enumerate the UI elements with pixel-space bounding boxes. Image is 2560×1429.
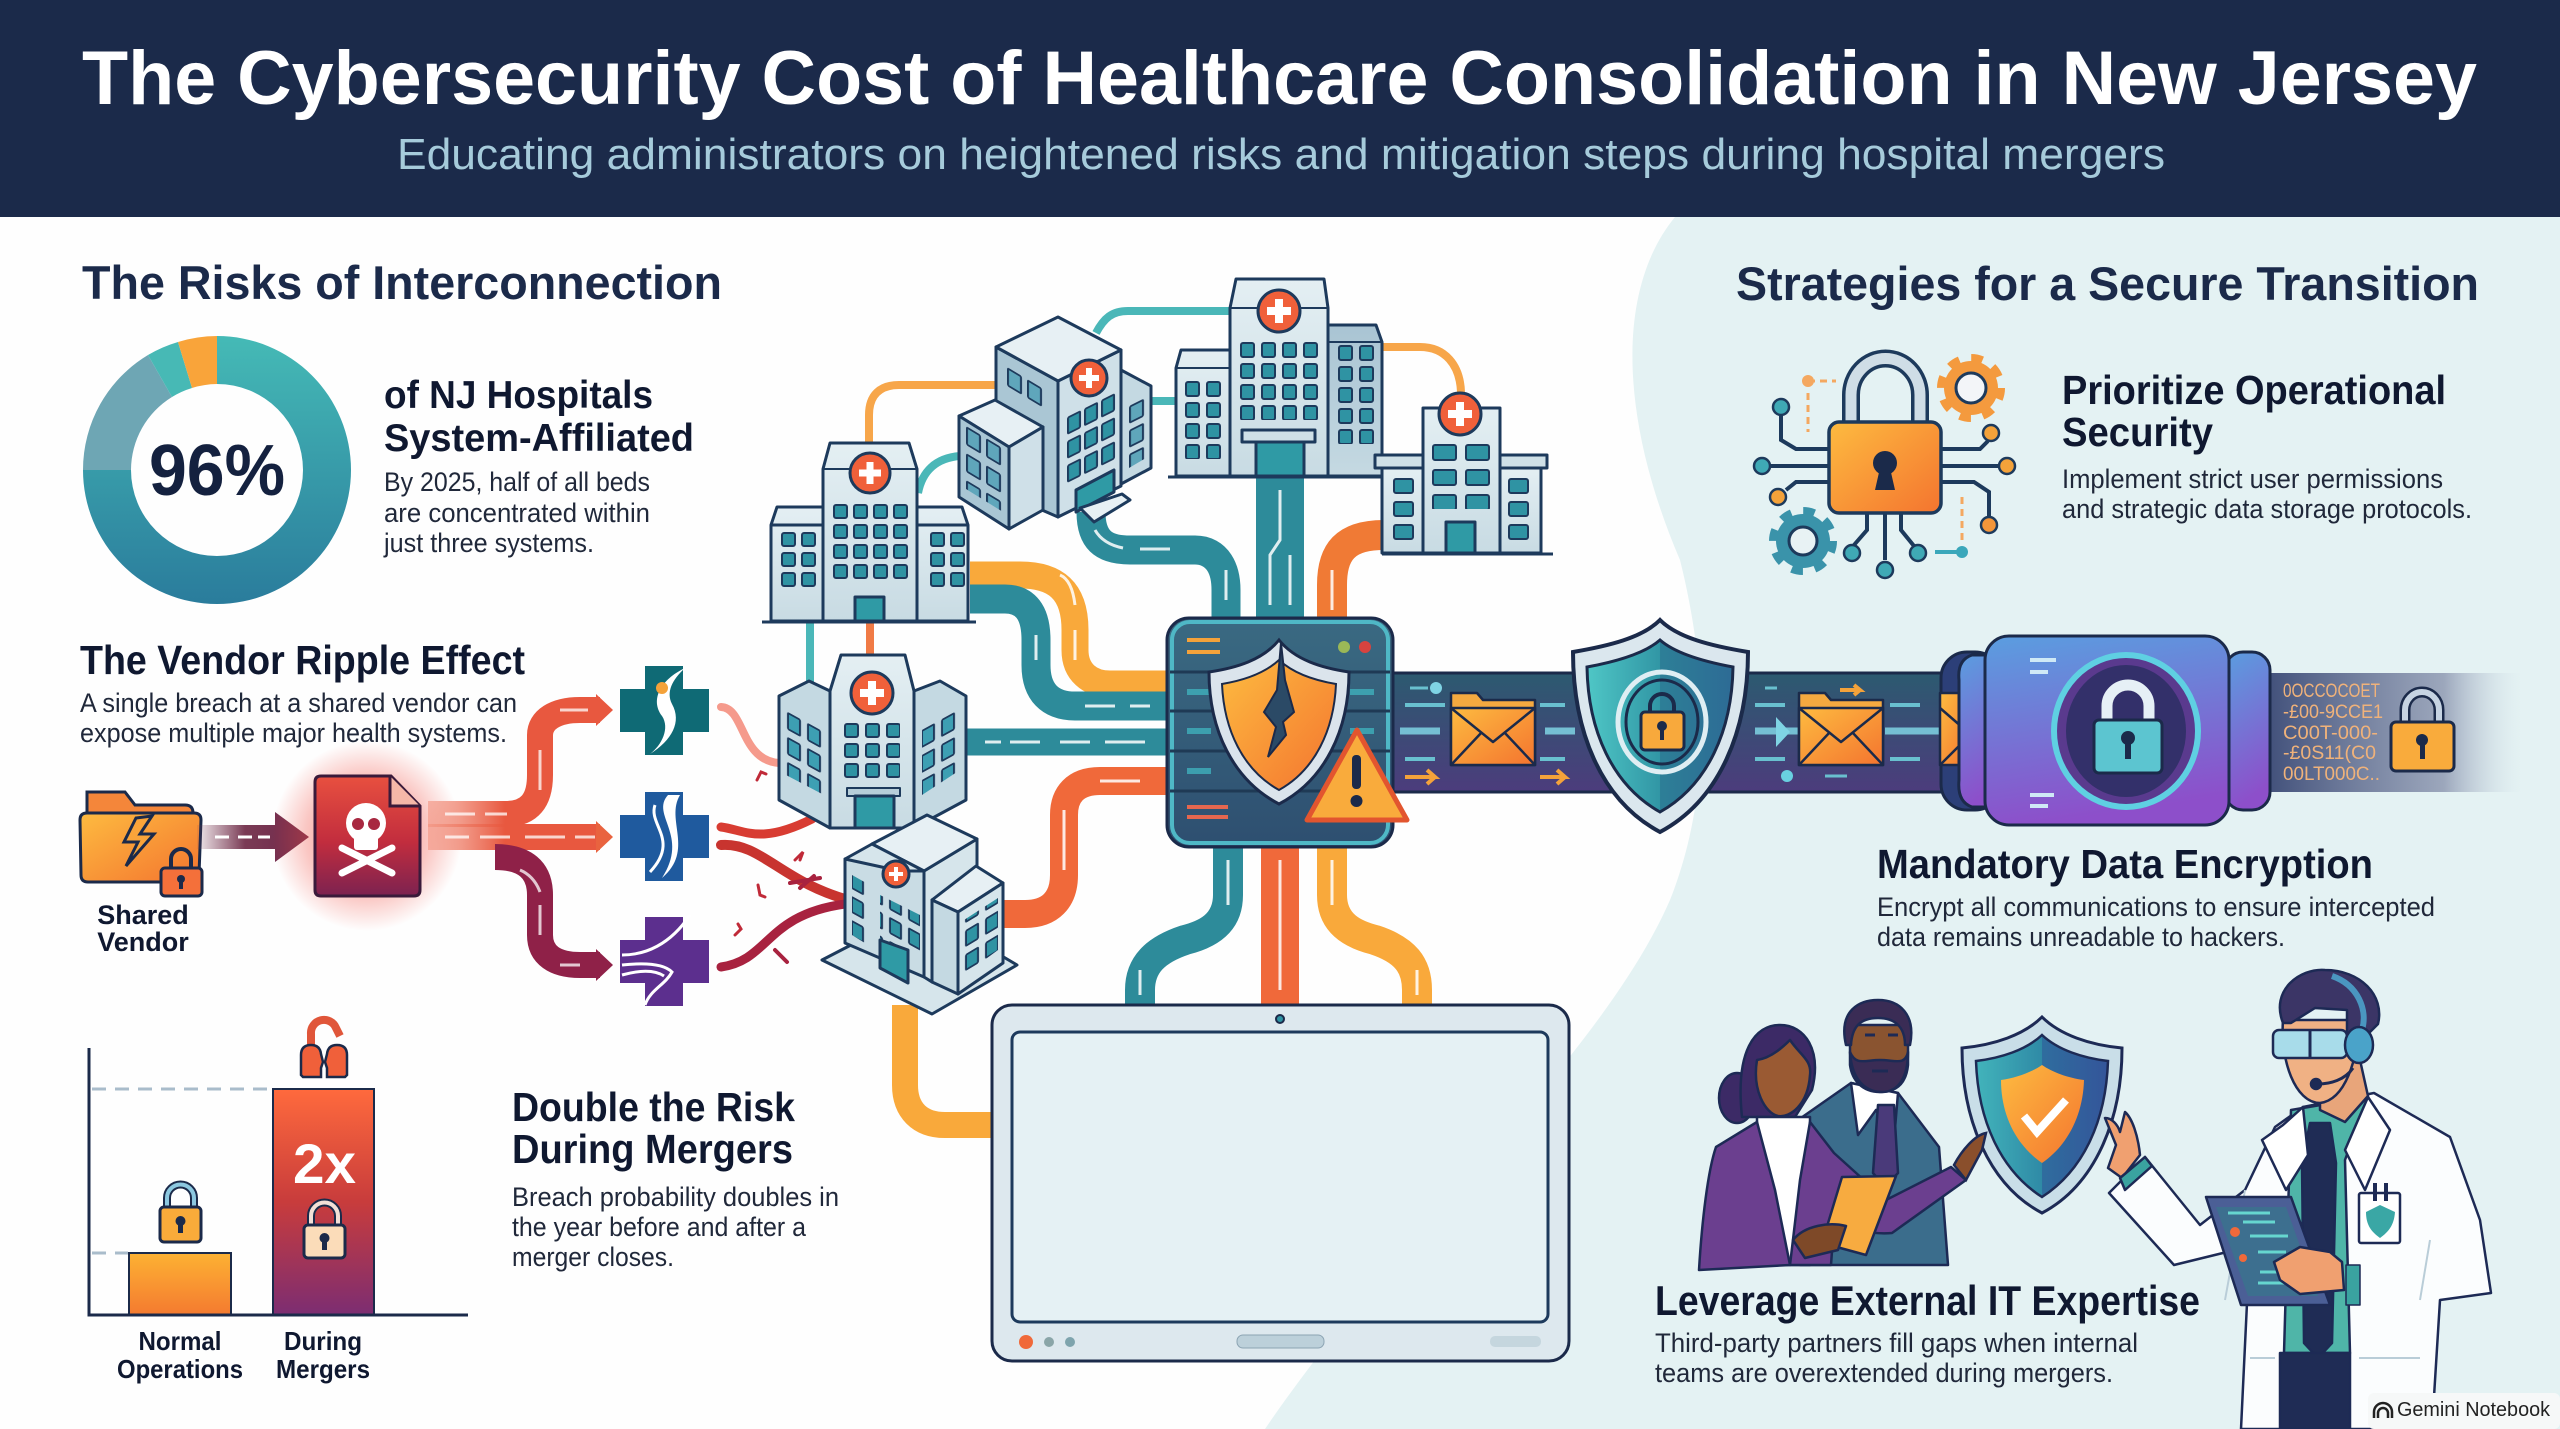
text block: prioritize operational security: Prioritize Operational (2062, 367, 2446, 413)
heading: risks of interconnection: The Risks of Interconnection (82, 256, 722, 309)
hair (2280, 970, 2379, 1040)
bar chart: breach risk (89, 1020, 468, 1384)
text block: prioritize operational security (2062, 367, 2472, 524)
arrow: vendor to breach (197, 812, 309, 862)
bar: normal operations (129, 1253, 231, 1315)
encrypted characters: 00LT000C.. (2283, 764, 2380, 785)
central server (1167, 618, 1407, 847)
stat text: system affiliated (383, 374, 694, 558)
illustration: IT expert (2105, 970, 2491, 1429)
icon: envelope one (1451, 693, 1535, 765)
watermark: gemini notebook (2368, 1393, 2560, 1429)
text block: double the risk: Breach probability doubles in (512, 1182, 839, 1212)
label: shared vendor: Vendor (97, 927, 189, 957)
hospital: isometric bottom (822, 815, 1017, 1014)
axis labels: During (284, 1326, 362, 1356)
text block: double the risk: Double the Risk (512, 1084, 795, 1130)
icon: shared vendor folder (80, 792, 202, 896)
icon: teal shield with lock (1573, 620, 1748, 832)
donut value: 96% (149, 431, 285, 511)
text block: mandatory data encryption: Mandatory Data Encryption (1877, 841, 2373, 887)
icon: warning triangle (1307, 730, 1407, 820)
text block: prioritize operational security: Security (2062, 409, 2213, 455)
stat text: system affiliated: of NJ Hospitals (384, 374, 653, 417)
hospital: left lower (779, 655, 966, 828)
icon: circuit padlock with gears (1754, 358, 2015, 578)
hospital: isometric top (959, 317, 1151, 529)
axis labels: Mergers (276, 1354, 370, 1384)
text block: leverage external IT expertise (1655, 1277, 2200, 1388)
goggles (2273, 1030, 2347, 1058)
subtitle: Educating administrators on heightened risks and mitigation steps during hospital mergers (397, 130, 2165, 179)
text block: vendor ripple effect: The Vendor Ripple Effect (80, 637, 525, 683)
icon: check shield (1962, 1017, 2122, 1213)
icon: cracked shield (1209, 640, 1349, 804)
hospital: left (762, 443, 976, 622)
encrypted characters: -£00-9CCE1 (2283, 702, 2383, 723)
text block: leverage external IT expertise: Third-party partners fill gaps when internal (1655, 1328, 2138, 1358)
logo: teal health system (620, 666, 709, 755)
label: shared vendor: Shared (97, 900, 189, 930)
axis labels: Normal (138, 1326, 222, 1356)
stat text: system affiliated: just three systems. (383, 528, 594, 558)
right hand (2274, 1247, 2344, 1294)
data roads between hospitals and server (905, 474, 1417, 1125)
gear orange (1941, 358, 2001, 418)
value: 2x: 2x (293, 1132, 356, 1195)
text block: double the risk: the year before and after a (512, 1212, 807, 1242)
label: shared vendor (97, 900, 189, 957)
bar: during mergers (273, 1089, 374, 1315)
icon: lock normal (160, 1184, 201, 1242)
encrypted characters: 0OCCOCOET (2283, 681, 2380, 702)
header banner (0, 0, 2560, 217)
stat text: system affiliated: System-Affiliated (384, 417, 694, 460)
donut chart: 96 percent (83, 336, 351, 604)
thin connector lines (810, 311, 1461, 685)
handheld tablet (2206, 1197, 2330, 1305)
text block: leverage external IT expertise: teams are overextended during mergers. (1655, 1358, 2113, 1388)
axis labels: Operations (117, 1354, 243, 1384)
icon: lock in bar (304, 1202, 345, 1258)
illustration: administrators (1699, 1000, 1966, 1270)
text block: double the risk: merger closes. (512, 1242, 674, 1272)
text block: vendor ripple effect (80, 637, 525, 748)
hand on shield (2105, 1112, 2140, 1178)
encrypted characters: -£0S11(C0 (2283, 743, 2376, 764)
icon: envelope three (1940, 693, 1970, 765)
hospital: top center (1168, 279, 1387, 477)
icon: envelope two (1799, 693, 1883, 765)
text block: mandatory data encryption (1877, 841, 2435, 952)
broken connections (721, 707, 845, 967)
axis labels (117, 1326, 370, 1384)
text block: vendor ripple effect: A single breach at a shared vendor can (80, 688, 517, 718)
lab coat (2109, 1093, 2491, 1429)
stat text: system affiliated: By 2025, half of all beds (384, 467, 650, 497)
encrypted characters: C00T-000- (2283, 723, 2378, 744)
icon: breached document with skull (272, 741, 462, 931)
stat text: system affiliated: are concentrated within (384, 498, 650, 528)
title: The Cybersecurity Cost of Healthcare Consolidation in New Jersey (82, 36, 2477, 121)
text block: mandatory data encryption: data remains unreadable to hackers. (1877, 922, 2285, 952)
man in suit (1798, 1000, 1948, 1265)
icon: output lock (2391, 692, 2454, 771)
face (2283, 1020, 2359, 1103)
tablet display (992, 1005, 1569, 1361)
coat pocket badge (2359, 1183, 2400, 1243)
headset (2332, 976, 2364, 1030)
woman's hand on shield (1954, 1133, 1986, 1180)
heading: strategies: Strategies for a Secure Transition (1736, 257, 2479, 310)
woman in purple (1699, 1025, 1966, 1270)
logo: blue health system (620, 792, 709, 881)
text block: double the risk: During Mergers (512, 1126, 793, 1172)
logo: purple health system (620, 915, 709, 1006)
ripple streams to health systems (428, 694, 613, 981)
icon: broken open lock (301, 1020, 347, 1077)
text block: prioritize operational security: and strategic data storage protocols. (2062, 494, 2472, 524)
text block: leverage external IT expertise: Leverage External IT Expertise (1655, 1277, 2200, 1324)
text block: double the risk (512, 1084, 839, 1272)
encrypted data pipeline (1390, 673, 2522, 792)
encrypted characters (2283, 681, 2383, 785)
watermark: gemini notebook: Gemini Notebook (2397, 1399, 2551, 1421)
panel: strategies background (1265, 217, 2560, 1429)
gear teal (1773, 511, 1833, 571)
icon: encryption device (1940, 636, 2270, 825)
text block: mandatory data encryption: Encrypt all communications to ensure intercepted (1877, 892, 2435, 922)
hospital: right (1375, 393, 1553, 554)
text block: prioritize operational security: Implement strict user permissions (2062, 464, 2443, 494)
text block: vendor ripple effect: expose multiple major health systems. (80, 718, 507, 748)
